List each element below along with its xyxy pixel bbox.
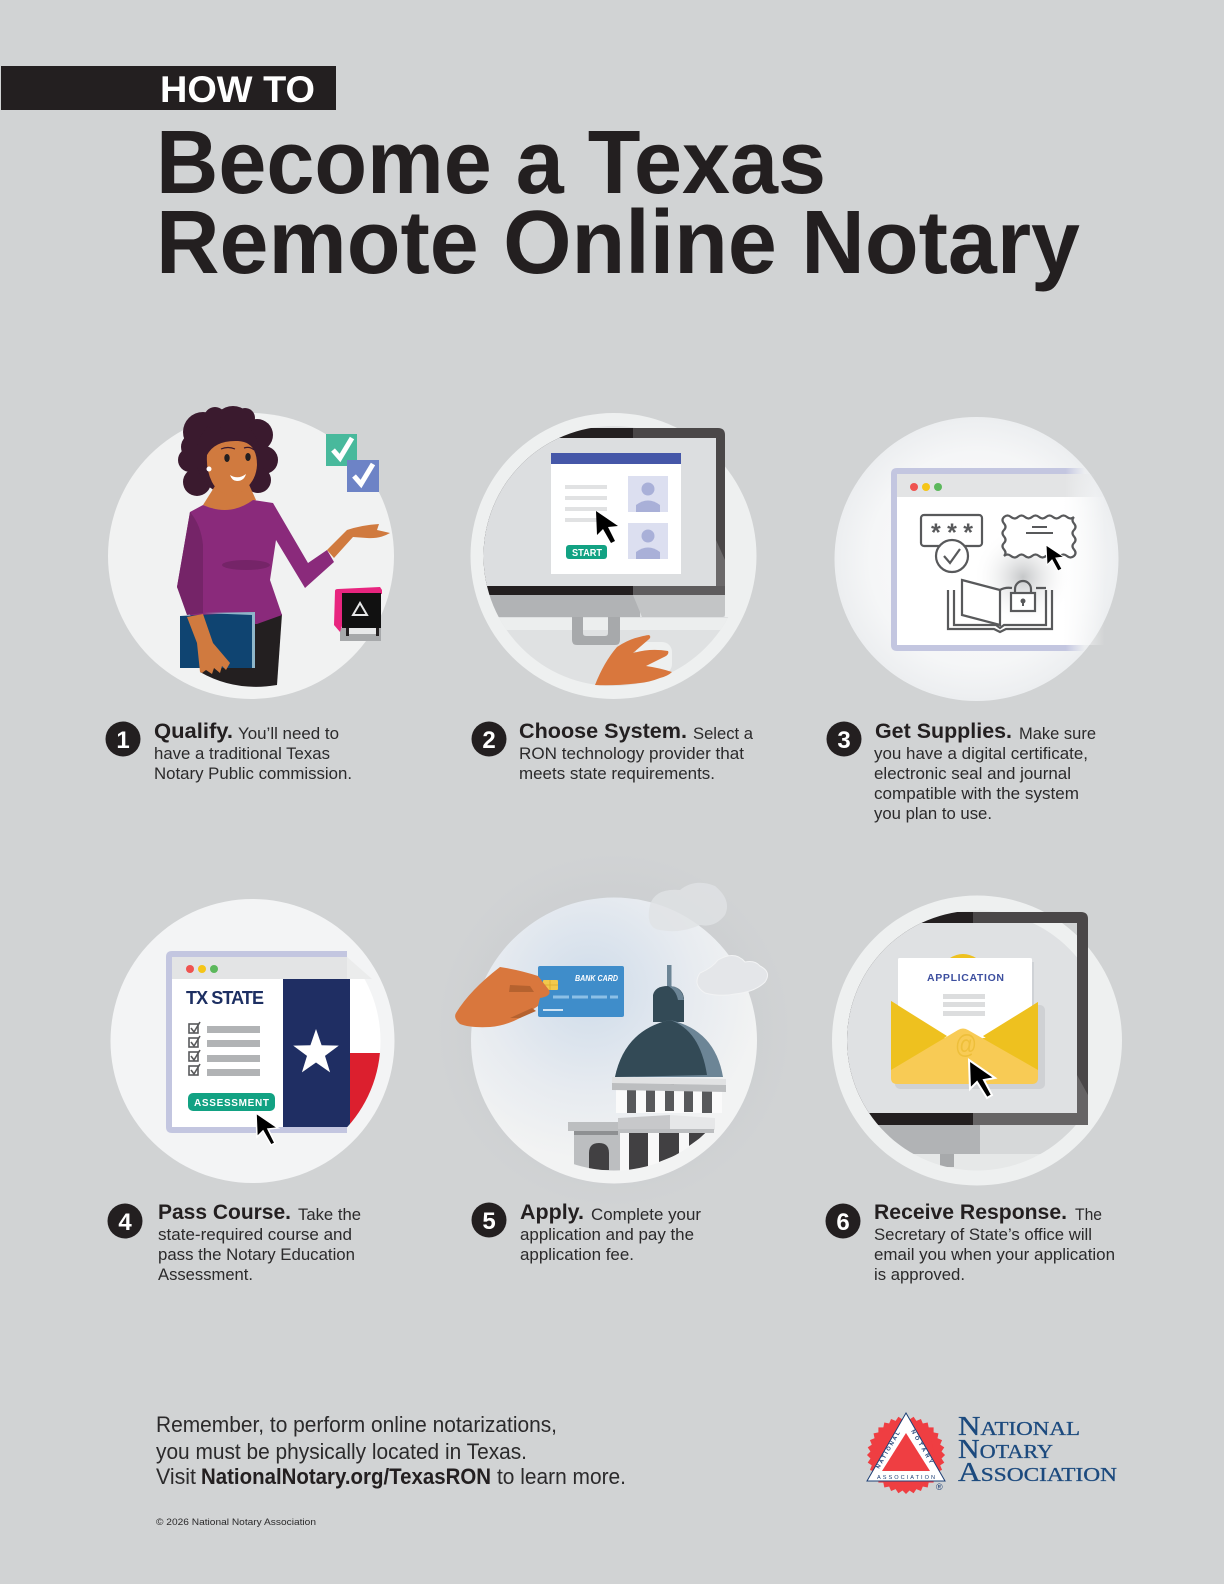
clouds	[649, 883, 727, 931]
cursor	[596, 511, 618, 543]
panel: step 4 pass course	[108, 899, 394, 1284]
raised hand	[327, 524, 390, 558]
logo seal	[867, 1413, 945, 1494]
hair	[178, 406, 278, 496]
step 3 text: you have a digital certificate,	[874, 744, 1088, 763]
skirt	[200, 614, 282, 687]
number badge 5	[472, 1202, 506, 1238]
number badge 2	[472, 722, 506, 756]
panel: step 6 receive response	[826, 896, 1122, 1284]
screen window	[551, 453, 681, 574]
envelope	[895, 1005, 1045, 1089]
number badge 3	[826, 722, 862, 756]
footer reminder text: Remember, to perform online notarizations,	[156, 1412, 557, 1437]
checkboxes	[326, 434, 357, 466]
illustration: TX state assessment browser: ASSESSMENT	[194, 1098, 269, 1109]
logo seal: ASSOCIATION	[877, 1475, 935, 1481]
illustration: monitor with envelope	[832, 896, 1122, 1186]
illustration: card payment and capitol: BANK CARD	[575, 973, 618, 983]
step 5 text: Apply.	[520, 1201, 584, 1224]
card	[538, 966, 624, 1017]
step 3 text: you plan to use.	[874, 804, 992, 823]
stamp	[340, 628, 381, 641]
step 6 text: Receive Response.	[874, 1201, 1067, 1224]
hand	[455, 967, 550, 1027]
journal icon	[948, 590, 1052, 632]
panel: step 1 qualify	[106, 406, 394, 783]
step 3 text: compatible with the system	[874, 784, 1079, 803]
title: Become a Texas	[156, 113, 826, 213]
footer reminder text: NationalNotary.org/TexasRON	[201, 1464, 491, 1489]
step 3 text: Get Supplies.	[875, 720, 1012, 743]
step 4 text: Assessment.	[158, 1265, 253, 1284]
illustration: monitor with envelope: APPLICATION	[927, 972, 1004, 984]
footer reminder text: to learn more.	[497, 1464, 626, 1489]
illustration: monitor with start screen: START	[572, 548, 602, 559]
step 6 text: The	[1075, 1205, 1102, 1224]
number badge 6: 6	[836, 1209, 850, 1236]
step 4 text: pass the Notary Education	[158, 1245, 355, 1264]
logo wordmark: ASSOCIATION	[958, 1457, 1117, 1487]
assessment button	[188, 1093, 275, 1111]
step 6 text	[874, 1201, 1115, 1284]
step 6 text: is approved.	[874, 1265, 965, 1284]
number badge 1	[106, 722, 140, 756]
step 5 text: application fee.	[520, 1245, 634, 1264]
step 1 text	[154, 720, 352, 783]
step 6 text: Secretary of State’s office will	[874, 1225, 1092, 1244]
panel: step 3 get supplies	[826, 417, 1118, 823]
step 1 text: have a traditional Texas	[154, 744, 330, 763]
password icon	[921, 515, 982, 546]
mouse and hand	[636, 642, 672, 674]
number badge 5: 5	[482, 1208, 496, 1235]
title	[156, 113, 1080, 293]
illustration: card payment and capitol	[455, 883, 768, 1184]
step 1 text: You’ll need to	[238, 724, 339, 743]
step 1 text: Notary Public commission.	[154, 764, 352, 783]
step 3 text: Make sure	[1019, 724, 1096, 743]
footer reminder text: you must be physically located in Texas.	[156, 1439, 527, 1464]
stand	[572, 617, 620, 645]
illustration: browser with supplies icons	[834, 417, 1118, 701]
number badge 4	[108, 1204, 142, 1238]
step 2 text: RON technology provider that	[519, 744, 744, 763]
step 5 text: Complete your	[591, 1205, 701, 1224]
capitol dome	[667, 965, 672, 989]
illustration: monitor with envelope: @	[955, 1029, 977, 1059]
logo seal: NOTARY	[909, 1429, 934, 1465]
step 2 text: meets state requirements.	[519, 764, 715, 783]
forearm	[187, 614, 230, 674]
number badge 2: 2	[482, 727, 496, 754]
neck	[203, 478, 256, 510]
number badge 4: 4	[118, 1209, 132, 1236]
illustration: monitor with start screen	[470, 413, 760, 699]
step 2 text	[519, 720, 754, 783]
title: Remote Online Notary	[156, 193, 1080, 293]
illustration: TX state assessment browser	[110, 899, 394, 1183]
panel: step 2 choose system	[470, 413, 760, 783]
logo wordmark	[958, 1411, 1117, 1487]
panel: step 5 apply	[455, 883, 768, 1264]
illustration: browser with supplies icons: ***	[931, 519, 973, 547]
step 1 text: Qualify.	[154, 720, 233, 743]
checklist	[189, 1022, 200, 1075]
book	[180, 612, 255, 668]
blouse	[177, 500, 334, 625]
copyright: © 2026 National Notary Association	[156, 1517, 316, 1528]
capitol base	[574, 1131, 706, 1170]
step 2 text: Select a	[693, 724, 754, 743]
certificate icon	[1002, 516, 1076, 558]
number badge 3: 3	[837, 727, 851, 754]
number badge 1: 1	[116, 727, 130, 754]
face	[207, 441, 257, 495]
step 4 text: Take the	[298, 1205, 361, 1224]
logo wordmark: NOTARY	[958, 1434, 1053, 1464]
step 5 text	[520, 1201, 701, 1264]
logo wordmark: NATIONAL	[958, 1411, 1080, 1441]
number badge 6	[826, 1204, 860, 1238]
footer reminder text: Visit	[156, 1464, 196, 1489]
logo seal: NATIONAL	[876, 1430, 902, 1470]
illustration: TX state assessment browser: TX STATE	[186, 988, 264, 1008]
illustration: woman with checkmarks and stamp	[108, 406, 394, 699]
step 4 text: state-required course and	[158, 1225, 352, 1244]
heading band: how to: HOW TO	[160, 69, 315, 110]
step 4 text: Pass Course.	[158, 1201, 291, 1224]
step 2 text: Choose System.	[519, 720, 687, 743]
start button	[566, 545, 607, 559]
footer reminder text	[156, 1412, 626, 1489]
step 6 text: email you when your application	[874, 1245, 1115, 1264]
step 3 text: electronic seal and journal	[874, 764, 1071, 783]
step 3 text	[874, 720, 1096, 823]
logo seal: ®	[936, 1482, 943, 1492]
step 5 text: application and pay the	[520, 1225, 694, 1244]
step 4 text	[158, 1201, 361, 1284]
logo: National Notary Association	[867, 1411, 1117, 1494]
heading band: how to	[1, 66, 336, 110]
